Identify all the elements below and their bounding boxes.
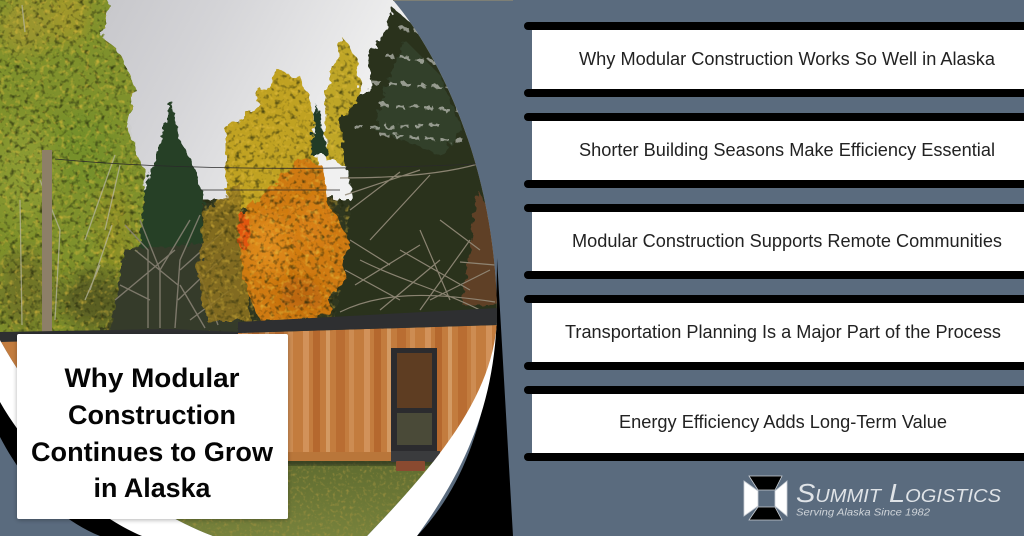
title card (17, 334, 288, 519)
icon: logo mark (744, 476, 787, 520)
dark understory with bare trees (110, 240, 240, 332)
sky (100, 0, 497, 330)
spruce tree centre (140, 100, 205, 250)
row 3 (524, 204, 1024, 279)
row 1 (524, 22, 1024, 97)
yellow-green birch trees at left (0, 0, 144, 335)
title: Continues to Grow (31, 437, 274, 467)
title: Why Modular (64, 363, 240, 393)
birch trunks and branches (20, 5, 120, 325)
top photo sliver (393, 0, 513, 1)
row 1: Why Modular Construction Works So Well in Alaska (579, 49, 996, 69)
cabin base trim (280, 452, 392, 461)
curved white accent lower left (0, 340, 213, 536)
bare branches right (340, 164, 495, 312)
title (31, 363, 274, 503)
company name: SUMMIT LOGISTICS (796, 478, 1001, 508)
row 2 (524, 113, 1024, 188)
grass lawn (176, 460, 434, 536)
ground shadow under cabin (280, 459, 450, 465)
title: in Alaska (94, 473, 211, 503)
curved white accent right of photo (367, 300, 497, 536)
curved black accent lower left (0, 400, 145, 536)
tree stump (396, 461, 425, 471)
title: Construction (68, 400, 236, 430)
row 2: Shorter Building Seasons Make Efficiency Essential (579, 140, 995, 160)
row 5 (524, 386, 1024, 461)
left cabin roof (0, 329, 238, 342)
row 5: Energy Efficiency Adds Long-Term Value (619, 412, 947, 432)
photo: modular cabin among autumn trees (0, 0, 510, 536)
utility wires (55, 159, 478, 190)
yellow autumn trees (198, 38, 364, 320)
row 4: Transportation Planning Is a Major Part of the Process (565, 322, 1001, 342)
left cabin wall (0, 340, 17, 368)
row 4 (524, 295, 1024, 370)
background forest (100, 140, 510, 335)
small spruce behind orange tree (310, 105, 328, 155)
orange maple tree (238, 157, 350, 322)
card background (17, 334, 288, 519)
utility pole (42, 150, 52, 332)
cabin wood wall (238, 325, 497, 460)
list of topics (524, 22, 1024, 461)
bare branches centre (115, 215, 230, 328)
door (391, 348, 440, 462)
tagline: Serving Alaska Since 1982 (796, 506, 930, 518)
cabin roof (238, 308, 497, 333)
tall dark spruce at right (335, 8, 510, 325)
curved black accent right of photo (417, 258, 513, 536)
row 3: Modular Construction Supports Remote Communities (572, 231, 1002, 251)
logo: Summit Logistics (744, 476, 1001, 520)
